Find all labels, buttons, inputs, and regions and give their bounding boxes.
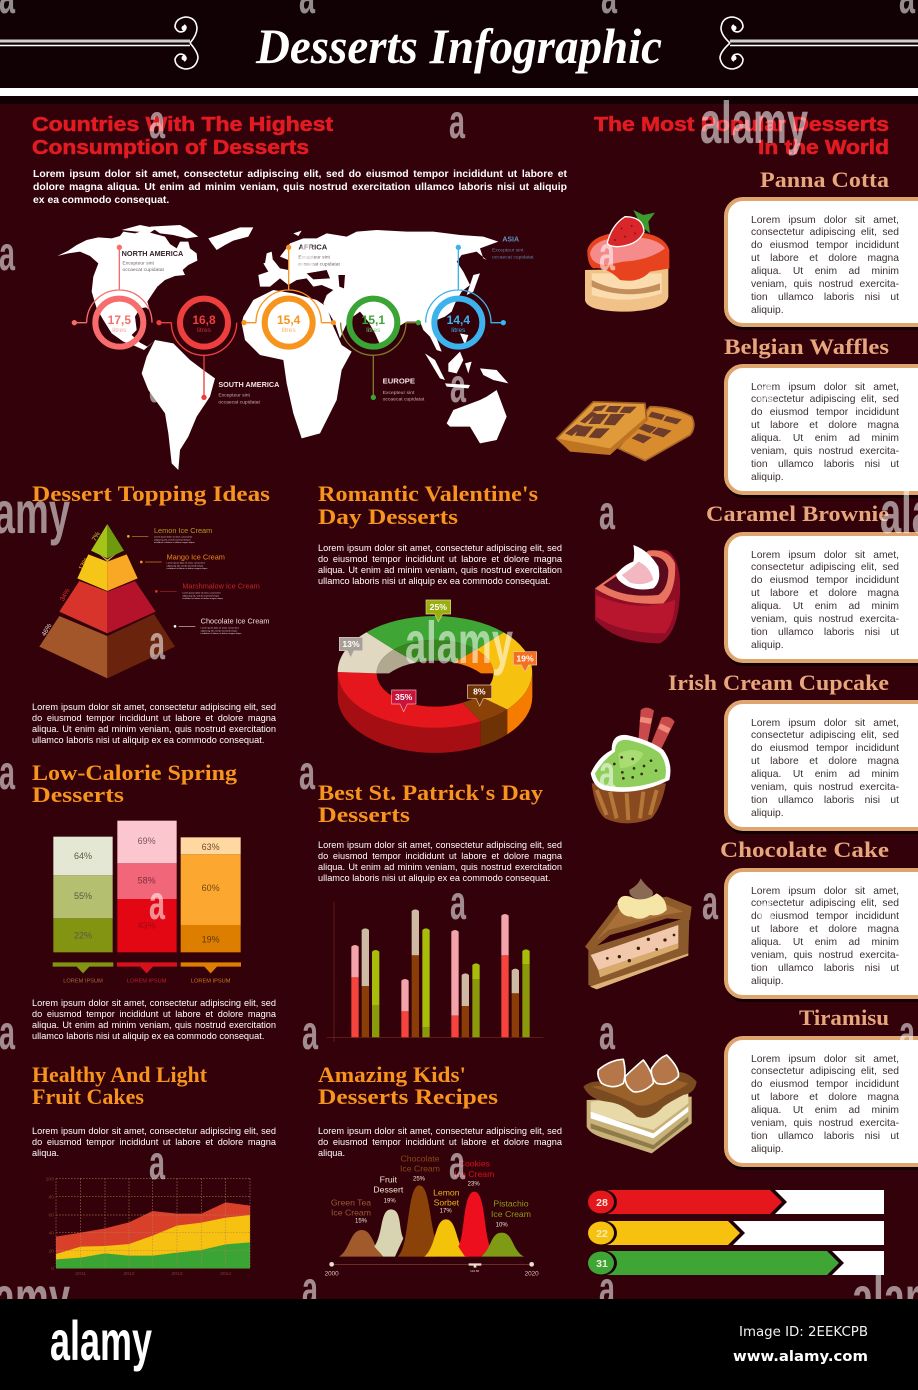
footer: stock image credit	[0, 1299, 918, 1390]
bell chart labels: Cookies	[459, 1159, 491, 1169]
text: website: www.alamy.com	[733, 1349, 868, 1365]
text: caramel brownie: Lorem ipsum dolor sit amet,	[751, 550, 899, 560]
pyramid chart: 7%	[91, 531, 102, 543]
text: fruit cakes paragraph: do eiusmod tempor incididunt ut labore et dolore magna	[32, 1137, 276, 1147]
pyramid chart: incididunt ut labore et dolore magna aliqua	[167, 567, 208, 570]
heading: tiramisu: Tiramisu	[799, 1005, 889, 1030]
heading: kids: Amazing Kids'	[318, 1062, 466, 1087]
ring: 14,4: litres	[451, 327, 466, 334]
region labels: occaecat cupidatat	[298, 261, 341, 267]
white band	[0, 88, 918, 96]
panel: progress arrows	[588, 1190, 884, 1276]
stacked bar chart: 63%	[202, 842, 220, 852]
text: irish cream cupcake: aliquip.	[751, 808, 784, 819]
watermark: alamy overlay: a	[149, 96, 165, 149]
ornament: right	[720, 17, 918, 69]
stacked bar chart: 55%	[74, 891, 92, 901]
text: kids paragraph: Lorem ipsum dolor sit amet, consectetur adipiscing elit, sed	[318, 1126, 562, 1136]
icon: cupcake	[591, 708, 675, 823]
text: panna cotta: tion ullamco laboris nisi ut	[751, 292, 899, 303]
pyramid labels	[127, 526, 270, 628]
region labels: AFRICA	[298, 242, 328, 251]
text: low-calorie paragraph: ullamco laboris nisi ut aliquip ex ea commodo consequat.	[32, 1031, 264, 1041]
heading: chocolate cake: Chocolate Cake	[720, 837, 889, 862]
text: tiramisu: Lorem ipsum dolor sit amet,	[751, 1054, 899, 1064]
text: tiramisu: ut labore et dolore magna	[751, 1092, 899, 1103]
3D donut chart	[338, 600, 537, 753]
bell chart labels: Ice Cream	[331, 1208, 371, 1218]
ring: 15,4: litres	[282, 327, 296, 334]
heading: fruit cakes: Fruit Cakes	[32, 1084, 144, 1109]
stacked bar chart: LOREM IPSUM	[127, 979, 167, 985]
text: topping paragraph: Lorem ipsum dolor sit amet, consectetur adipiscing elit, sed	[32, 702, 276, 712]
region labels: ASIA	[502, 237, 519, 244]
region labels: Excepteur sint	[122, 260, 155, 266]
heading: valentine: Day Desserts	[318, 504, 458, 529]
pyramid labels: Mango Ice Cream	[167, 552, 225, 561]
heading: caramel brownie: Caramel Brownie	[706, 501, 889, 526]
text: irish cream cupcake: veniam, quis nostrud exercita-	[751, 782, 899, 793]
watermark: alamy overlay: a	[299, 228, 315, 281]
text: kids paragraph	[318, 1126, 562, 1158]
area chart	[46, 1176, 250, 1277]
text: belgian waffles: veniam, quis nostrud exercita-	[751, 446, 899, 457]
text: tiramisu	[751, 1054, 899, 1155]
watermark: alamy overlay: a	[449, 96, 465, 149]
pyramid chart: 34%	[59, 588, 72, 603]
text: intro paragraph: Lorem ipsum dolor sit amet, consectetur adipiscing elit, sed do eiusmod tempor incididunt ut labore et	[33, 168, 567, 180]
heading: belgian waffles: Belgian Waffles	[724, 334, 889, 359]
region labels: NORTH AMERICA	[122, 249, 184, 258]
icon: brownie	[595, 545, 680, 643]
timeline: 123.56	[470, 1269, 480, 1273]
text: panna cotta: consectetur adipiscing elit, sed	[751, 227, 899, 238]
watermark: alamy overlay: a	[449, 1137, 465, 1190]
dessert: belgian waffles	[556, 334, 918, 498]
area chart: 2013	[171, 1271, 183, 1277]
logo: alamy: alamy	[50, 1309, 152, 1372]
heading: valentine	[318, 481, 538, 529]
ring: 14,4	[426, 245, 506, 347]
text: panna cotta: do eiusmod tempor incididunt	[751, 240, 899, 251]
stacked bar chart: 19%	[202, 935, 220, 945]
text: panna cotta: veniam, quis nostrud exercita-	[751, 279, 899, 290]
watermark: alamy overlay: alamy	[700, 90, 808, 156]
stacked bar chart: 64%	[74, 851, 92, 861]
text: tiramisu: tion ullamco laboris nisi ut	[751, 1131, 899, 1142]
watermark: alamy overlay: a	[450, 877, 466, 930]
text: low-calorie paragraph: Lorem ipsum dolor sit amet, consectetur adipiscing elit, sed	[32, 998, 276, 1008]
watermark: alamy overlay: a	[149, 617, 165, 670]
card: chocolate cake	[726, 870, 918, 1002]
text: chocolate cake: ut labore et dolore magna	[751, 924, 899, 935]
pyramid chart: 46%	[41, 623, 53, 638]
area chart: 80	[48, 1194, 54, 1200]
region labels: Excepteur sint	[298, 254, 331, 260]
watermark: alamy overlay: alamy	[405, 610, 513, 676]
text: chocolate cake	[751, 886, 899, 987]
card: irish cream cupcake	[726, 702, 918, 834]
region labels: occaecat cupidatat	[383, 397, 425, 403]
text: chocolate cake: consectetur adipiscing elit, sed	[751, 898, 899, 909]
dessert: panna cotta	[585, 167, 918, 330]
watermark: alamy overlay: a	[702, 877, 718, 930]
card: belgian waffles	[726, 366, 918, 498]
watermark: alamy overlay: a	[302, 1007, 318, 1060]
bell chart labels: Green Tea	[331, 1198, 371, 1208]
text: st patrick paragraph: do eiusmod tempor incididunt ut labore et dolore magna	[318, 851, 562, 861]
heading: low-calorie	[32, 760, 237, 807]
region labels: occaecat cupidatat	[492, 255, 534, 261]
bell chart labels	[331, 1153, 531, 1229]
text: belgian waffles: ut labore et dolore magna	[751, 420, 899, 431]
heading: countries: Consumption of Desserts	[32, 137, 309, 159]
bell chart labels: Sorbet	[434, 1197, 460, 1207]
text: caramel brownie: aliqua. Ut enim ad minim	[751, 601, 899, 612]
area chart: 2014	[220, 1271, 231, 1277]
ring: 17,5: 17,5	[108, 313, 131, 327]
text: belgian waffles	[751, 382, 899, 483]
stacked bar chart: LOREM IPSUM	[191, 979, 231, 985]
text: st patrick paragraph: Lorem ipsum dolor sit amet, consectetur adipiscing elit, sed	[318, 840, 562, 850]
stacked bar chart: 60%	[202, 883, 220, 893]
text: valentine paragraph: do eiusmod tempor incididunt ut labore et dolore magna	[318, 554, 562, 564]
area chart: 60	[48, 1213, 54, 1219]
text: low-calorie paragraph: aliqua. Ut enim ad minim veniam, quis nostrud exercitation	[32, 1020, 276, 1030]
text: caramel brownie: ut labore et dolore magna	[751, 588, 899, 599]
ring: 15,1: 15,1	[362, 313, 385, 327]
watermark: alamy overlay: a	[149, 877, 165, 930]
bell chart labels: Ice Cream	[400, 1164, 440, 1174]
text: belgian waffles: aliquip.	[751, 472, 784, 483]
stacked bar chart: 43%	[138, 921, 156, 931]
icon: tiramisu	[583, 1055, 697, 1153]
card: panna cotta	[726, 199, 918, 330]
header banner	[0, 0, 918, 104]
text: intro paragraph: ex ea commodo consequat.	[33, 194, 169, 206]
timeline: 2020	[525, 1270, 539, 1277]
arrow: 31	[588, 1250, 884, 1276]
bell chart labels: Dessert	[373, 1184, 404, 1194]
pyramid chart: adipiscing elit, sed do eiusmod tempor	[201, 629, 238, 632]
icon: waffles	[557, 402, 694, 461]
donut labels: 13%	[342, 639, 360, 649]
text: kids paragraph: do eiusmod tempor incididunt ut labore et dolore magna	[318, 1137, 562, 1147]
timeline	[325, 1262, 539, 1277]
text: tiramisu: consectetur adipiscing elit, sed	[751, 1066, 899, 1077]
text: panna cotta: aliquip.	[751, 305, 784, 316]
title: Desserts Infographic	[255, 18, 662, 74]
text: chocolate cake: aliquip.	[751, 976, 784, 987]
pyramid chart: incididunt ut labore et dolore magna aliqua	[154, 541, 195, 544]
bell chart labels: Ice Cream	[454, 1169, 494, 1179]
heading: most popular	[594, 114, 889, 159]
text: irish cream cupcake: Lorem ipsum dolor sit amet,	[751, 718, 899, 728]
text: tiramisu: veniam, quis nostrud exercita-	[751, 1118, 899, 1129]
text: tiramisu: do eiusmod tempor incididunt	[751, 1079, 899, 1090]
pyramid labels: Marshmalow Ice Cream	[182, 582, 260, 591]
grouped bar chart	[327, 902, 543, 1042]
pyramid chart: Lorem ipsum dolor sit amet, consectetur	[154, 536, 193, 539]
pyramid chart: adipiscing elit, sed do eiusmod tempor	[167, 564, 204, 567]
text: caramel brownie	[751, 550, 899, 651]
ring: 15,1: litres	[366, 327, 381, 334]
text: panna cotta: Lorem ipsum dolor sit amet,	[751, 214, 899, 226]
text: chocolate cake: do eiusmod tempor incididunt	[751, 911, 899, 922]
watermark: alamy overlay: a	[599, 487, 615, 540]
donut labels: 19%	[516, 653, 534, 663]
timeline: 2000	[325, 1270, 339, 1277]
stacked bar chart: 58%	[138, 876, 156, 886]
card: caramel brownie	[726, 534, 918, 666]
text: valentine paragraph: Lorem ipsum dolor sit amet, consectetur adipiscing elit, sed	[318, 542, 562, 552]
text: chocolate cake: aliqua. Ut enim ad minim	[751, 937, 899, 948]
donut labels: 35%	[395, 692, 413, 702]
heading: low-calorie: Low-Calorie Spring	[32, 760, 237, 785]
region labels: Excepteur sint	[218, 392, 251, 398]
region labels: Excepteur sint	[492, 248, 524, 254]
ring: 17,5: litres	[112, 327, 127, 334]
bell chart labels: Fruit	[380, 1174, 398, 1184]
text: belgian waffles: consectetur adipiscing elit, sed	[751, 394, 899, 405]
text: chocolate cake: Lorem ipsum dolor sit amet,	[751, 886, 899, 896]
heading: valentine: Romantic Valentine's	[318, 481, 538, 506]
panel: most popular desserts column	[556, 114, 918, 1170]
text: fruit cakes paragraph: aliqua.	[32, 1148, 59, 1158]
text: belgian waffles: Lorem ipsum dolor sit amet,	[751, 382, 899, 392]
heading: countries	[32, 114, 333, 159]
bell chart labels: Pistachio	[493, 1199, 529, 1209]
text: st patrick paragraph: ullamco laboris nisi ut aliquip ex ea commodo consequat.	[318, 873, 550, 883]
heading: st patrick: Desserts	[318, 802, 411, 827]
text: intro paragraph	[33, 168, 567, 206]
text: irish cream cupcake: ut labore et dolore magna	[751, 756, 899, 767]
panel: healthy and light fruit cakes	[32, 1062, 276, 1277]
text: irish cream cupcake	[751, 718, 899, 819]
bell chart labels: 10%	[496, 1223, 508, 1229]
pyramid chart	[39, 524, 270, 678]
watermark: alamy overlay: a	[149, 360, 165, 413]
text: panna cotta	[751, 214, 899, 316]
ring: 16,8	[156, 299, 237, 400]
pyramid chart: Lorem ipsum dolor sit amet, consectetur	[167, 562, 205, 565]
region labels: occaecat cupidatat	[218, 399, 261, 405]
area chart: 40	[48, 1230, 54, 1236]
text: st patrick paragraph	[318, 840, 562, 883]
ornament: left	[0, 17, 198, 69]
text: caramel brownie: tion ullamco laboris nisi ut	[751, 627, 899, 638]
heading: most popular: In the World	[758, 137, 889, 159]
heading: kids	[318, 1062, 498, 1109]
ring: 15,4: 15,4	[277, 313, 301, 327]
text: topping paragraph: do eiusmod tempor incididunt ut labore et dolore magna	[32, 713, 276, 723]
arrow: 22	[588, 1220, 884, 1246]
ring: 16,8: litres	[197, 327, 212, 334]
text: st patrick paragraph: aliqua. Ut enim ad minim veniam, quis nostrud exercitation	[318, 862, 562, 872]
heading: st patrick	[318, 780, 543, 827]
text: irish cream cupcake: consectetur adipiscing elit, sed	[751, 730, 899, 741]
bell chart labels: 19%	[384, 1198, 396, 1204]
watermark: alamy overlay: a	[599, 1007, 615, 1060]
stacked bar chart: 22%	[74, 931, 92, 941]
arrow: 28	[588, 1190, 884, 1214]
heading: countries: Countries With The Highest	[32, 114, 333, 136]
pyramid chart: incididunt ut labore et dolore magna aliqua	[182, 597, 224, 600]
bell chart labels: Lemon	[433, 1187, 460, 1197]
text: valentine paragraph: aliqua. Ut enim ad minim veniam, quis nostrud exercitation	[318, 565, 562, 575]
region labels: EUROPE	[383, 377, 415, 386]
bell chart labels: 23%	[468, 1182, 480, 1188]
ring: 15,1	[341, 299, 421, 400]
text: panna cotta: ut labore et dolore magna	[751, 253, 899, 264]
pyramid labels: Lemon Ice Cream	[154, 526, 212, 535]
text: chocolate cake: veniam, quis nostrud exercita-	[751, 950, 899, 961]
bell chart labels: 17%	[440, 1208, 452, 1214]
text: valentine paragraph	[318, 542, 562, 586]
panel: best St. Patrick's day desserts	[318, 780, 562, 1042]
dessert: chocolate cake	[585, 837, 918, 1002]
text: topping paragraph: ullamco laboris nisi ut aliquip ex ea commodo consequat.	[32, 735, 264, 745]
dessert: tiramisu	[583, 1005, 918, 1170]
watermark: alamy overlay: a	[299, 747, 315, 800]
donut labels: 25%	[430, 602, 447, 612]
arrow: 31: 31	[596, 1258, 608, 1270]
text: intro paragraph: dolore magna aliqua. Ut enim ad minim veniam, quis nostrud exercitation ullamco laboris nisi ut aliquip	[33, 182, 567, 192]
arrow: 28: 28	[596, 1197, 608, 1209]
area chart: 2011	[75, 1271, 86, 1277]
bell chart labels: 25%	[413, 1177, 426, 1183]
heading: fruit cakes	[32, 1062, 208, 1109]
text: panna cotta: aliqua. Ut enim ad minim	[751, 266, 899, 277]
watermark: alamy overlay: a	[599, 228, 615, 281]
text: fruit cakes paragraph	[32, 1126, 276, 1158]
bell chart labels: Chocolate	[401, 1153, 440, 1163]
pyramid chart: Lorem ipsum dolor sit amet, consectetur	[201, 627, 239, 630]
bell curve chart	[325, 1153, 539, 1277]
panel: romantic valentine's day desserts	[318, 481, 562, 753]
text: chocolate cake: tion ullamco laboris nisi ut	[751, 963, 899, 974]
region labels: SOUTH AMERICA	[218, 380, 280, 389]
text: caramel brownie: aliquip.	[751, 640, 784, 651]
text: tiramisu: aliquip.	[751, 1144, 784, 1155]
area chart: 0	[51, 1266, 54, 1272]
icon: panna cotta	[585, 210, 669, 312]
area chart: 100	[46, 1176, 54, 1182]
pyramid chart: adipiscing elit, sed do eiusmod tempor	[182, 594, 219, 597]
text: irish cream cupcake: tion ullamco laboris nisi ut	[751, 795, 899, 806]
donut labels	[339, 600, 537, 712]
stacked bar chart: 69%	[138, 836, 156, 846]
region labels: occaecat cupidatat	[122, 267, 165, 273]
arrow: 22: 22	[596, 1228, 608, 1240]
text: kids paragraph: aliqua.	[318, 1148, 345, 1158]
pyramid chart: 13%	[78, 557, 90, 572]
text: low-calorie paragraph	[32, 998, 276, 1041]
pyramid chart: Lorem ipsum dolor sit amet, consectetur	[182, 592, 221, 595]
stacked bar chart	[53, 821, 241, 985]
text: caramel brownie: consectetur adipiscing elit, sed	[751, 562, 899, 573]
text: caramel brownie: do eiusmod tempor incididunt	[751, 575, 899, 586]
map silhouette	[57, 225, 508, 470]
area chart: 2012	[123, 1271, 135, 1277]
text: image id: Image ID: 2EEKCPB	[739, 1324, 868, 1340]
bell chart labels: Ice Cream	[491, 1209, 531, 1219]
text: irish cream cupcake: aliqua. Ut enim ad minim	[751, 769, 899, 780]
panel: low-calorie spring desserts	[32, 760, 276, 1041]
text: topping paragraph	[32, 702, 276, 745]
panel: dessert topping ideas	[32, 481, 276, 745]
watermark: alamy overlay: a	[599, 747, 615, 800]
card: tiramisu	[726, 1038, 918, 1170]
ring: 17,5	[72, 245, 152, 347]
world map with rings	[57, 225, 534, 470]
watermark: alamy overlay: a	[757, 877, 773, 930]
dessert: irish cream cupcake	[590, 670, 918, 834]
text: low-calorie paragraph: do eiusmod tempor incididunt ut labore et dolore magna	[32, 1009, 276, 1019]
panel: amazing kids' desserts recipes	[318, 1062, 562, 1277]
heading: kids: Desserts Recipes	[318, 1084, 498, 1109]
text: topping paragraph: aliqua. Ut enim ad minim veniam, quis nostrud exercitation	[32, 724, 276, 734]
watermark: alamy overlay: a	[757, 360, 773, 413]
text: belgian waffles: do eiusmod tempor incididunt	[751, 407, 899, 418]
heading: fruit cakes: Healthy And Light	[32, 1062, 208, 1087]
text: belgian waffles: aliqua. Ut enim ad minim	[751, 433, 899, 444]
heading: most popular: The Most Popular Desserts	[594, 114, 889, 136]
text: valentine paragraph: ullamco laboris nisi ut aliquip ex ea commodo consequat.	[318, 576, 550, 586]
text: tiramisu: aliqua. Ut enim ad minim	[751, 1105, 899, 1116]
watermark: alamy overlay: a	[450, 360, 466, 413]
area chart: 20	[48, 1248, 54, 1254]
bell chart labels: 15%	[355, 1219, 368, 1225]
ring: 16,8: 16,8	[192, 313, 216, 327]
stacked bar chart: LOREM IPSUM	[63, 979, 103, 985]
heading: panna cotta: Panna Cotta	[760, 167, 889, 192]
heading: st patrick: Best St. Patrick's Day	[318, 780, 543, 805]
text: belgian waffles: tion ullamco laboris nisi ut	[751, 459, 899, 470]
text: caramel brownie: veniam, quis nostrud exercita-	[751, 614, 899, 625]
ring: 15,4	[241, 245, 336, 347]
region labels: Excepteur sint	[383, 390, 415, 396]
heading: low-calorie: Desserts	[32, 782, 125, 807]
ring: 14,4: 14,4	[447, 313, 470, 327]
pyramid labels: Chocolate Ice Cream	[201, 617, 270, 626]
heading: topping: Dessert Topping Ideas	[32, 481, 270, 506]
dessert: caramel brownie	[595, 501, 918, 666]
watermark: alamy overlay: a	[149, 1137, 165, 1190]
text: irish cream cupcake: do eiusmod tempor incididunt	[751, 743, 899, 754]
icon: chocolate cake	[585, 878, 692, 989]
text: fruit cakes paragraph: Lorem ipsum dolor sit amet, consectetur adipiscing elit, sed	[32, 1126, 276, 1136]
heading: irish cream cupcake: Irish Cream Cupcake	[668, 670, 889, 695]
pyramid chart: incididunt ut labore et dolore magna aliqua	[201, 632, 242, 635]
region labels	[122, 237, 534, 405]
donut labels: 8%	[473, 687, 486, 697]
panel: countries with highest consumption	[32, 114, 567, 470]
pyramid chart: adipiscing elit, sed do eiusmod tempor	[154, 538, 191, 541]
